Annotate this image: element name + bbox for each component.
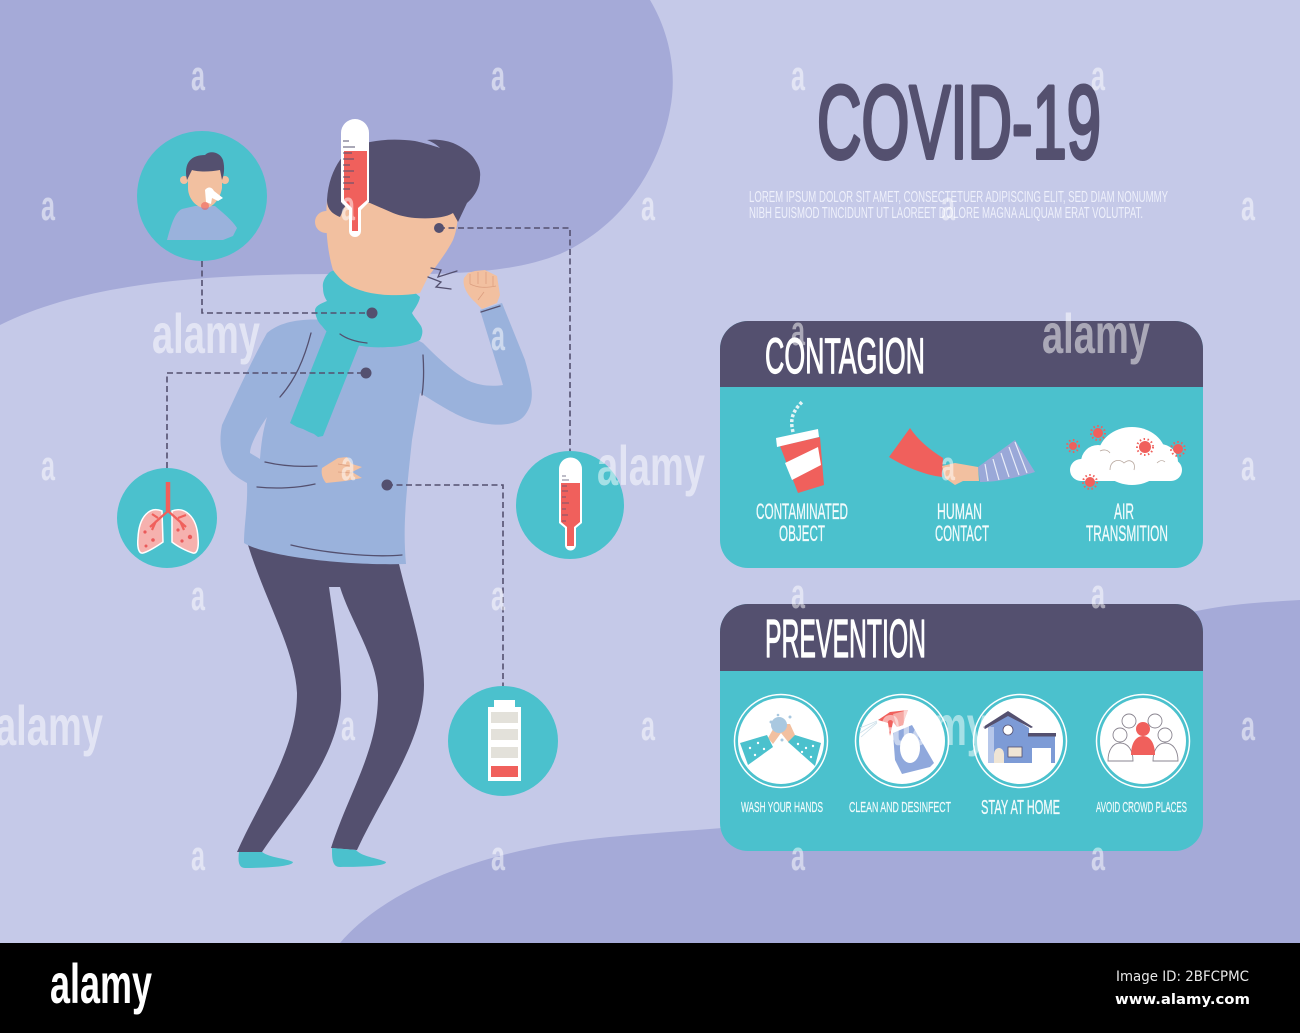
watermarks: a bbox=[491, 832, 505, 879]
icon: spray bottle bbox=[856, 694, 948, 788]
label: wash your hands: WASH YOUR HANDS bbox=[741, 799, 823, 816]
arm gap bbox=[250, 417, 267, 459]
watermarks: a bbox=[41, 442, 55, 489]
watermarks: a bbox=[641, 702, 655, 749]
label: clean and disinfect: CLEAN AND DESINFECT bbox=[849, 799, 951, 816]
symptom icon: runny nose bbox=[137, 131, 267, 261]
watermarks: a bbox=[941, 442, 955, 489]
label: contaminated object: CONTAMINATED bbox=[756, 499, 848, 524]
watermarks: a bbox=[1091, 832, 1105, 879]
watermarks: a bbox=[1241, 442, 1255, 489]
label: avoid crowd places: AVOID CROWD PLACES bbox=[1096, 799, 1187, 816]
watermarks: a bbox=[41, 182, 55, 229]
watermarks: a bbox=[491, 572, 505, 619]
coat seams bbox=[257, 306, 500, 556]
icon: house bbox=[974, 694, 1066, 788]
panel: prevention bbox=[720, 604, 1203, 851]
hair bbox=[327, 140, 480, 222]
fist bbox=[464, 270, 500, 309]
icon: human contact bbox=[889, 428, 1035, 485]
watermarks: a bbox=[791, 52, 805, 99]
watermarks: a bbox=[341, 182, 355, 229]
background blob: bottom bbox=[340, 600, 1300, 943]
watermarks: a bbox=[1241, 182, 1255, 229]
background blob: top bbox=[0, 0, 673, 325]
watermarks: a bbox=[491, 52, 505, 99]
website: www.alamy.com bbox=[1115, 992, 1250, 1008]
person illustration bbox=[220, 119, 532, 868]
watermarks: a bbox=[641, 182, 655, 229]
connector: lungs symptom bbox=[167, 373, 366, 468]
watermarks: a bbox=[791, 832, 805, 879]
connector: nose symptom bbox=[202, 261, 372, 313]
intro text bbox=[749, 189, 1168, 222]
symptom icon: lungs bbox=[117, 468, 217, 568]
footer bar bbox=[0, 943, 1300, 1033]
watermarks: a bbox=[341, 702, 355, 749]
icon: wash hands bbox=[734, 694, 828, 788]
watermarks: a bbox=[191, 832, 205, 879]
watermarks: a bbox=[791, 570, 805, 617]
head bbox=[326, 170, 458, 295]
icon: air transmission cloud bbox=[1067, 426, 1185, 489]
watermarks: a bbox=[191, 52, 205, 99]
panel: contagion: TRANSMITION bbox=[1086, 521, 1168, 546]
symptom icon: low battery bbox=[448, 686, 558, 796]
shoes bbox=[239, 848, 386, 868]
connector: fever symptom bbox=[439, 228, 570, 452]
title: COVID-19 bbox=[817, 65, 1101, 181]
watermarks bbox=[0, 52, 1255, 879]
connector: fatigue symptom bbox=[387, 485, 503, 686]
watermarks: a bbox=[1241, 702, 1255, 749]
body thermometer bbox=[341, 119, 369, 237]
label: stay at home: STAY AT HOME bbox=[981, 797, 1060, 819]
watermarks: alamy bbox=[152, 302, 260, 365]
watermarks: a bbox=[1091, 570, 1105, 617]
panel: contagion: OBJECT bbox=[779, 521, 825, 546]
ear bbox=[315, 211, 337, 233]
icon: contaminated cup bbox=[776, 402, 824, 493]
legs bbox=[237, 545, 424, 852]
watermarks: a bbox=[191, 572, 205, 619]
label: air transmission: AIR bbox=[1114, 499, 1134, 524]
watermarks: a bbox=[341, 442, 355, 489]
watermarks: a bbox=[1091, 52, 1105, 99]
watermarks: alamy bbox=[880, 694, 988, 757]
label: human contact: HUMAN bbox=[937, 499, 982, 524]
connector dots bbox=[360, 223, 444, 490]
watermarks: a bbox=[491, 312, 505, 359]
watermarks: alamy bbox=[1042, 302, 1150, 365]
coat bbox=[220, 303, 532, 564]
belly hand bbox=[322, 457, 362, 483]
image id: Image ID: 2BFCPMC bbox=[1116, 969, 1249, 985]
scarf tail bbox=[290, 330, 360, 437]
panel: contagion bbox=[720, 321, 1203, 568]
cough marks bbox=[428, 268, 457, 289]
heading: contagion: CONTAGION bbox=[765, 328, 925, 384]
icon: crowd bbox=[1096, 694, 1190, 788]
footer logo: alamy bbox=[50, 952, 152, 1015]
watermarks: a bbox=[941, 182, 955, 229]
symptom icon: fever thermometer bbox=[516, 451, 624, 559]
scarf bbox=[315, 265, 422, 347]
panel: prevention: PREVENTION bbox=[765, 609, 926, 669]
panel: contagion: CONTACT bbox=[935, 521, 989, 546]
watermarks: alamy bbox=[597, 434, 705, 497]
watermarks: a bbox=[791, 307, 805, 354]
